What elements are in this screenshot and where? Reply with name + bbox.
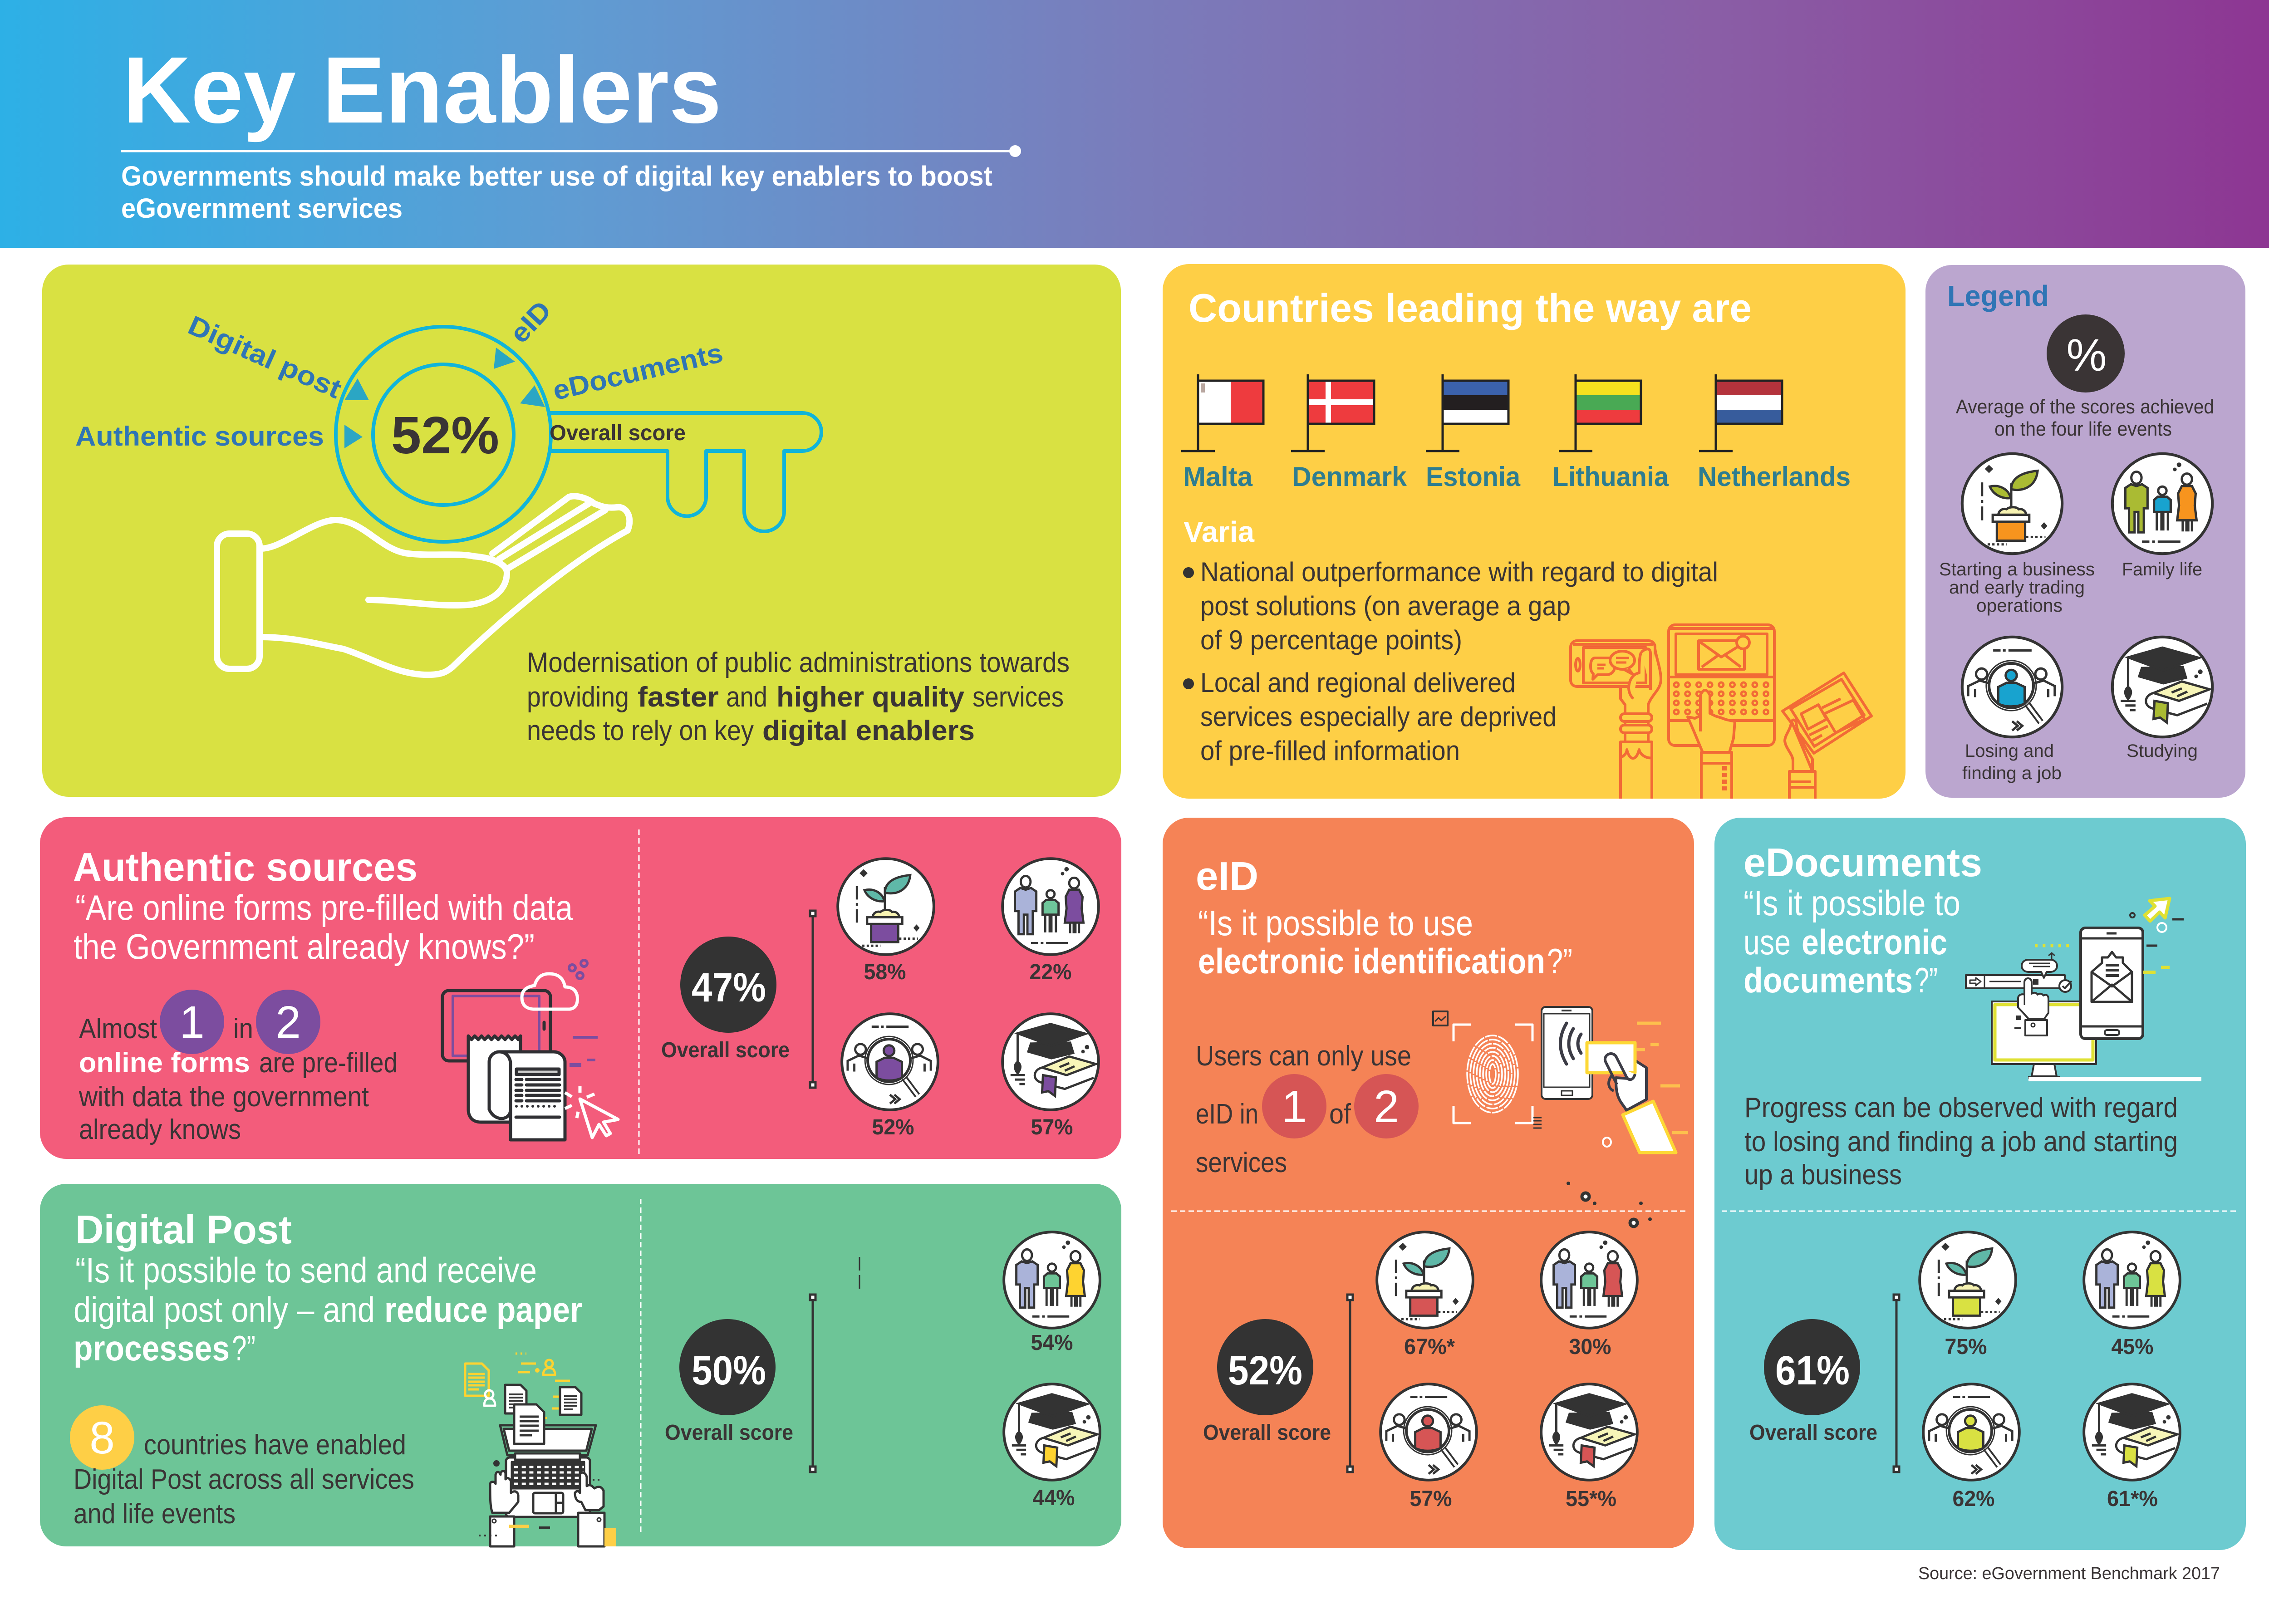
legend labels: Family life bbox=[2122, 559, 2202, 579]
header banner bbox=[0, 0, 2269, 248]
statistic: 1 in 2: 1 bbox=[179, 997, 205, 1048]
panel: eDocuments bbox=[1714, 818, 2246, 1550]
icon: open hand bbox=[217, 496, 629, 675]
flag: Denmark bbox=[1291, 374, 1374, 451]
country names: Denmark bbox=[1292, 461, 1407, 492]
panel: digital post bbox=[40, 1184, 1121, 1546]
varia heading: Varia bbox=[1184, 515, 1254, 548]
life event scores: 75% bbox=[1945, 1335, 1987, 1359]
illustration: monitor and phone bbox=[1966, 898, 2201, 1081]
overall score: Overall score bbox=[1203, 1421, 1331, 1445]
subtitle bbox=[121, 161, 992, 224]
statistic: 1 of 2 bbox=[1196, 1040, 1419, 1178]
life event scores: 55*% bbox=[1566, 1487, 1616, 1511]
arrows pointing into the key bbox=[344, 348, 545, 448]
overall score: Overall score bbox=[661, 1038, 790, 1062]
overall score: 52% bbox=[1228, 1348, 1302, 1393]
question: “Is it possible to send and receive bbox=[75, 1250, 537, 1290]
question: electronic identification bbox=[1198, 941, 1545, 981]
overall score bbox=[661, 937, 790, 1062]
modernisation statement: digital enablers bbox=[762, 715, 975, 746]
legend labels: Studying bbox=[2127, 741, 2198, 761]
life event icons bbox=[1920, 1232, 2180, 1480]
bracket connector bbox=[810, 911, 815, 1088]
overall score: Overall score bbox=[1749, 1421, 1877, 1445]
heading: Countries leading the way are bbox=[1189, 285, 1752, 330]
statistic: 1 of 2: of bbox=[1329, 1099, 1351, 1130]
legend percent description: on the four life events bbox=[1994, 418, 2172, 440]
statistic: 8 countries: 8 bbox=[89, 1413, 115, 1463]
statistic: 8 countries: countries have enabled bbox=[144, 1429, 406, 1461]
modernisation statement: providing bbox=[527, 682, 629, 713]
statistic: 1 in 2 bbox=[79, 990, 398, 1145]
legend labels bbox=[1939, 559, 2202, 783]
statistic: 1 in 2: 2 bbox=[275, 997, 301, 1048]
question: documents bbox=[1743, 960, 1913, 1000]
illustration: fingerprint and phone bbox=[1433, 1007, 1688, 1227]
varia bullet list: Local and regional delivered bbox=[1200, 667, 1516, 698]
question: ?” bbox=[1547, 941, 1572, 981]
life event scores: 61*% bbox=[2107, 1487, 2158, 1511]
statistic: 1 in 2: with data the government bbox=[79, 1081, 369, 1113]
overall score bbox=[1203, 1319, 1331, 1445]
panel: key enablers overview bbox=[42, 265, 1121, 797]
question: “Are online forms pre-filled with data bbox=[75, 888, 573, 927]
question: ?” bbox=[232, 1328, 255, 1368]
progress statement bbox=[1744, 1092, 2178, 1191]
title: Key Enablers bbox=[123, 38, 722, 143]
life event scores bbox=[1031, 1331, 1075, 1510]
heading: eDocuments bbox=[1743, 840, 1982, 885]
statistic: 1 of 2: 1 bbox=[1282, 1081, 1307, 1132]
overall score bbox=[665, 1319, 793, 1445]
life event icons bbox=[1004, 1232, 1100, 1480]
statistic: 1 of 2: eID in bbox=[1196, 1099, 1258, 1130]
heading: Authentic sources bbox=[73, 844, 417, 889]
statistic: 1 of 2: services bbox=[1196, 1147, 1287, 1178]
country names: Netherlands bbox=[1698, 461, 1851, 492]
varia bullet list: post solutions (on average a gap bbox=[1200, 591, 1571, 621]
heading: eID bbox=[1196, 854, 1258, 898]
key label eID: eID bbox=[504, 295, 557, 349]
bracket connector bbox=[810, 1295, 815, 1472]
country names bbox=[1183, 461, 1851, 492]
icon: studying bbox=[2112, 637, 2212, 737]
legend heading: Legend bbox=[1947, 280, 2049, 312]
varia bullet list: services especially are deprived bbox=[1200, 702, 1557, 732]
overall score: 47% bbox=[692, 965, 766, 1011]
flag: Malta bbox=[1181, 374, 1263, 451]
country names: Malta bbox=[1183, 461, 1253, 492]
legend labels: finding a job bbox=[1962, 763, 2062, 783]
modernisation statement: faster bbox=[638, 682, 719, 713]
life event scores: 57% bbox=[1031, 1115, 1073, 1139]
statistic: 8 countries bbox=[70, 1405, 414, 1530]
country names: Estonia bbox=[1426, 461, 1521, 492]
question: reduce paper bbox=[384, 1290, 582, 1330]
life event scores: 67%* bbox=[1404, 1335, 1455, 1359]
life event scores: 52% bbox=[872, 1115, 914, 1139]
legend labels: and early trading bbox=[1949, 578, 2085, 598]
life event icons bbox=[1377, 1232, 1637, 1480]
country names: Lithuania bbox=[1552, 461, 1669, 492]
statistic: 8 countries: Digital Post across all services bbox=[74, 1464, 414, 1495]
life event scores: 44% bbox=[1033, 1486, 1075, 1510]
question: processes bbox=[74, 1328, 230, 1368]
overall score label: Overall score bbox=[550, 421, 686, 445]
title rule with dot bbox=[121, 145, 1021, 157]
life event scores: 58% bbox=[864, 960, 906, 984]
question bbox=[1743, 883, 1960, 1000]
question bbox=[74, 1250, 582, 1368]
legend labels: Losing and bbox=[1965, 741, 2054, 761]
overall score bbox=[1749, 1319, 1877, 1445]
flag: Lithuania bbox=[1559, 374, 1641, 451]
progress statement: Progress can be observed with regard bbox=[1744, 1092, 2178, 1124]
overall score 52%: 52% bbox=[391, 406, 499, 465]
overall score: 50% bbox=[692, 1348, 766, 1393]
statistic: 1 in 2: already knows bbox=[79, 1114, 241, 1145]
question: digital post only – and bbox=[74, 1290, 375, 1330]
life event scores bbox=[864, 960, 1073, 1139]
varia bullet list: National outperformance with regard to digital bbox=[1200, 557, 1718, 587]
legend labels: operations bbox=[1976, 596, 2063, 616]
icon: losing and finding a job bbox=[1962, 637, 2062, 737]
statistic: 1 in 2: are pre-filled bbox=[259, 1047, 398, 1079]
panel: eID bbox=[1163, 818, 1694, 1548]
legend percent marker: % bbox=[2067, 330, 2107, 381]
life event scores: 57% bbox=[1410, 1487, 1452, 1511]
legend percent description: Average of the scores achieved bbox=[1956, 396, 2214, 418]
key label authentic sources: Authentic sources bbox=[75, 421, 324, 451]
key label digital post: Digital post bbox=[184, 310, 346, 404]
progress statement: to losing and finding a job and starting bbox=[1744, 1126, 2178, 1158]
modernisation statement: and bbox=[726, 682, 767, 713]
modernisation statement bbox=[527, 647, 1070, 746]
life event scores: 62% bbox=[1952, 1487, 1995, 1511]
statistic: 1 of 2: 2 bbox=[1374, 1081, 1399, 1132]
varia bullet list: of pre-filled information bbox=[1200, 736, 1460, 766]
statistic: 1 in 2: in bbox=[233, 1013, 253, 1045]
legend labels: Starting a business bbox=[1939, 559, 2095, 579]
life event scores bbox=[1945, 1335, 2158, 1511]
varia bullet list bbox=[1183, 557, 1718, 766]
flag: Estonia bbox=[1426, 374, 1508, 451]
overall score: Overall score bbox=[665, 1421, 793, 1445]
life event scores bbox=[1404, 1335, 1616, 1511]
modernisation statement: needs to rely on key bbox=[527, 715, 754, 746]
panel: authentic sources bbox=[40, 817, 1121, 1159]
life event scores: 22% bbox=[1029, 960, 1072, 984]
icon: starting a business bbox=[1962, 454, 2062, 554]
icon: family life bbox=[2112, 454, 2212, 554]
illustration: tablet, form and cursor bbox=[442, 960, 618, 1140]
modernisation statement: higher quality bbox=[776, 682, 965, 713]
life event scores: 54% bbox=[1031, 1331, 1073, 1355]
heading: Digital Post bbox=[75, 1207, 292, 1252]
legend percent marker bbox=[2047, 314, 2125, 393]
illustration: laptop and documents bbox=[465, 1354, 616, 1546]
question: ?” bbox=[1915, 960, 1938, 1000]
life event scores: 45% bbox=[2111, 1335, 2154, 1359]
modernisation statement: services bbox=[972, 682, 1064, 713]
statistic: 8 countries: and life events bbox=[74, 1498, 236, 1530]
question bbox=[1198, 903, 1572, 981]
question: “Is it possible to bbox=[1743, 883, 1960, 923]
life event scores: 30% bbox=[1569, 1335, 1611, 1359]
bracket connector bbox=[1894, 1295, 1899, 1472]
question bbox=[74, 888, 573, 967]
question: “Is it possible to use bbox=[1198, 903, 1473, 943]
icon: key bbox=[336, 327, 821, 542]
varia bullet list: of 9 percentage points) bbox=[1200, 625, 1462, 655]
key label eDocuments: eDocuments bbox=[550, 337, 726, 406]
overall score: 61% bbox=[1775, 1348, 1850, 1393]
question: the Government already knows?” bbox=[74, 927, 535, 967]
modernisation statement: Modernisation of public administrations towards bbox=[527, 647, 1070, 678]
statistic: 1 of 2: Users can only use bbox=[1196, 1040, 1411, 1072]
question: electronic bbox=[1802, 922, 1947, 962]
life event icons bbox=[838, 859, 1099, 1110]
flag: Netherlands bbox=[1699, 374, 1782, 451]
panel: leading countries bbox=[1163, 264, 1906, 799]
subtitle: Governments should make better use of digital key enablers to boost bbox=[121, 161, 992, 191]
panel: legend bbox=[1925, 265, 2245, 798]
subtitle: eGovernment services bbox=[121, 193, 403, 224]
source note: Source: eGovernment Benchmark 2017 bbox=[1918, 1564, 2220, 1583]
bracket connector bbox=[1347, 1295, 1353, 1472]
statistic: 1 in 2: Almost bbox=[79, 1013, 157, 1045]
statistic: 1 in 2: online forms bbox=[79, 1047, 250, 1079]
legend percent description bbox=[1956, 396, 2214, 440]
illustration: hands holding devices bbox=[1571, 625, 1871, 799]
progress statement: up a business bbox=[1744, 1159, 1902, 1191]
question: use bbox=[1743, 922, 1791, 962]
